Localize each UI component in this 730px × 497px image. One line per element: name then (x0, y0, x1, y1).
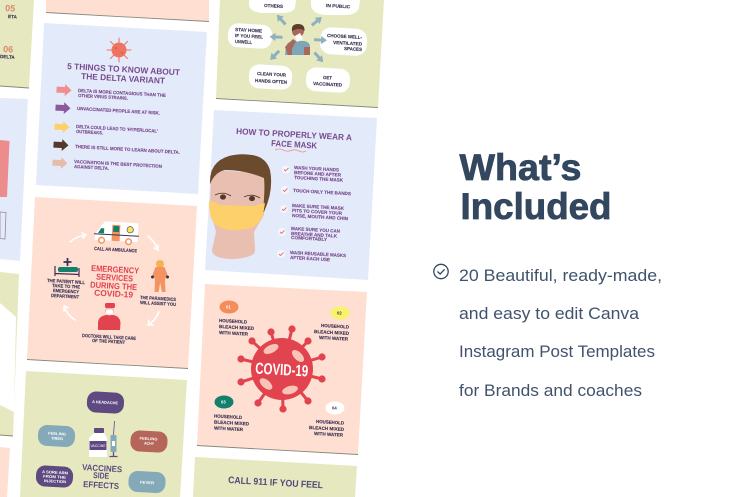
item 01: 01 (226, 304, 231, 310)
tip labels: HANDS OFTEN (255, 78, 288, 85)
text block: description (459, 266, 662, 400)
item 03: BLEACH MIXED (214, 420, 250, 426)
panel: top left green card (0, 0, 34, 88)
list: delta facts: OUTBREAKS. (76, 129, 103, 136)
heading: THE DELTA VARIANT (81, 71, 166, 86)
bubble: fever (128, 470, 166, 494)
bubble: sore arm: A SORE ARM (42, 469, 68, 475)
checklist: AFTER EACH USE (290, 255, 330, 262)
icon: coronavirus: COVID-19 (255, 361, 309, 380)
item 03: WITH WATER (214, 426, 244, 432)
tip labels: IN PUBLIC (326, 3, 351, 9)
item 02: BLEACH MIXED (314, 329, 350, 336)
caption: doctors (82, 333, 136, 345)
heading: EFFECTS (83, 479, 120, 491)
tip labels: VACCINATED (313, 81, 343, 88)
bubble: tired (37, 424, 76, 447)
heading: SERVICES (96, 272, 134, 284)
bubble: headache: A HEADACHE (92, 399, 119, 405)
arrows: cycle (64, 233, 159, 325)
checklist: FITS TO COVER YOUR (292, 208, 343, 216)
icon: syringe (110, 421, 118, 456)
tip labels (235, 3, 363, 88)
panel: top pink card (46, 0, 209, 22)
tip labels: IF YOU FEEL (235, 33, 263, 40)
item 04: 04 (332, 406, 337, 410)
list: delta facts: THERE IS STILL MORE TO LEARN ABOUT DELTA. (75, 144, 180, 155)
heading: EMERGENCY (91, 263, 140, 276)
caption: patient: DEPARTMENT (51, 293, 79, 300)
tip labels: SPACES (344, 46, 362, 52)
heading: DURING THE (90, 280, 138, 292)
panel: top left green card: 06 (3, 44, 13, 55)
panel: top left green card: 05 (5, 3, 15, 14)
checklist: WASH YOUR HANDS (294, 165, 339, 173)
caption: call ambulance: CALL AN AMBULANCE (94, 246, 137, 253)
list: delta facts (52, 84, 180, 171)
tip labels: VENTILATED (333, 40, 363, 47)
checklist: MAKE SURE THE MASK (292, 203, 345, 211)
list: delta facts: AGAINST DELTA. (74, 164, 109, 171)
icon: paramedic (151, 260, 169, 292)
heading: 5 THINGS TO KNOW ABOUT (67, 61, 181, 77)
item 03: 03 (221, 400, 226, 404)
title (460, 147, 612, 227)
panel: left green card (0, 272, 19, 436)
heading (90, 263, 140, 300)
arrows (267, 12, 327, 65)
item 01: HOUSEHOLD (219, 318, 248, 325)
tip labels: OTHERS (264, 3, 283, 9)
heading: FACE MASK (271, 138, 318, 151)
heading: HOW TO PROPERLY WEAR A (236, 126, 352, 142)
bubble: sore arm: FROM THE (43, 474, 67, 480)
item 03: HOUSEHOLD (214, 414, 243, 420)
illustration: face with mask (209, 154, 271, 259)
checklist: BREATHE AND TALK (291, 231, 338, 239)
panel: bottom left pink card (0, 447, 10, 497)
icon: hospital bed (55, 258, 79, 277)
bubble: fever: FEVER (140, 480, 154, 485)
panel: top left green card: DELTA (0, 54, 16, 60)
panel: call 911 (193, 457, 357, 497)
caption: doctors: DOCTORS WILL TAKE CARE (82, 333, 136, 341)
panel: vaccine side effects (20, 371, 187, 497)
icon: ambulance (93, 221, 140, 245)
item 02: HOUSEHOLD (321, 323, 350, 330)
tip labels: CLEAN YOUR (257, 71, 287, 78)
tip labels: GET (323, 75, 332, 81)
item 04: WITH WATER (314, 431, 344, 438)
icon: virus (107, 38, 131, 62)
bubbles (227, 0, 368, 93)
heading (82, 462, 123, 491)
item 01 (219, 300, 255, 337)
item 04: BLEACH MIXED (309, 425, 345, 432)
panel: emergency services (27, 197, 197, 368)
caption: paramedics: THE PARAMEDICS (140, 295, 176, 302)
checklist: NOSE, MOUTH AND CHIN (292, 213, 349, 221)
bubble: headache (86, 391, 125, 414)
item 04: HOUSEHOLD (316, 419, 345, 426)
bubble: achy (130, 430, 168, 453)
item 02: 02 (337, 310, 342, 316)
heading: SIDE (93, 470, 110, 481)
checklist: BEFORE AND AFTER (294, 170, 342, 178)
icon: sneezing person (285, 24, 310, 55)
card heading: CALL 911 IF YOU FEEL (228, 475, 323, 491)
caption: patient: THE PATIENT WILL (47, 278, 85, 285)
text block: description: 20 Beautiful, ready-made, (459, 266, 662, 285)
panel: how to wear a mask (205, 110, 377, 280)
caption: paramedics (140, 295, 177, 307)
panel: prevention tips (216, 0, 384, 108)
panel: top left green card: ETA (8, 14, 18, 20)
checklist (277, 165, 351, 262)
bubble: sore arm: INJECTION (44, 478, 66, 484)
checklist: MAKE SURE YOU CAN (291, 226, 341, 234)
text block: description: and easy to edit Canva (459, 304, 640, 323)
icon: check circle (434, 264, 448, 279)
bubble: achy: ACHY (144, 441, 155, 446)
heading: COVID-19 (94, 288, 134, 300)
tip labels: CHOOSE WELL- (327, 33, 363, 40)
item 01: WITH WATER (219, 330, 249, 337)
bubble: tired: FEELING (48, 431, 66, 437)
list: delta facts: UNVACCINATED PEOPLE ARE AT RISK. (77, 106, 160, 116)
caption: patient: TAKE TO THE (52, 283, 80, 290)
list: delta facts: DELTA COULD LEAD TO 'HYPERLOCAL' (76, 124, 158, 134)
title: Included (460, 186, 612, 227)
icon: coronavirus (237, 325, 326, 413)
list: delta facts: DELTA IS MORE CONTAGIOUS THAN THE (78, 88, 166, 98)
item 04 (309, 402, 345, 438)
text block: description: Instagram Post Templates (459, 342, 655, 361)
icon: doctor (98, 303, 120, 330)
title: What’s (460, 147, 582, 188)
item 02 (314, 306, 350, 342)
item 03 (214, 396, 250, 432)
checklist: WASH REUSABLE MASKS (290, 250, 346, 258)
checklist: COMFORTABLY (291, 235, 327, 242)
list: delta facts: VACCINATION IS THE BEST PROTECTION (74, 159, 163, 169)
caption: patient (47, 278, 85, 300)
checklist: TOUCHING THE MASK (294, 175, 344, 183)
caption: doctors: OF THE PATIENT (92, 338, 125, 345)
heading (236, 126, 352, 151)
item 01: BLEACH MIXED (219, 324, 255, 331)
item 02: WITH WATER (319, 335, 349, 342)
icon: vaccine bottle: VACCINE (90, 444, 106, 448)
bubble: tired: TIRED (51, 436, 63, 441)
icon: vaccine bottle (89, 428, 107, 457)
list: delta facts: OTHER VIRUS STRAINS. (78, 93, 128, 101)
caption: paramedics: WILL ASSIST YOU (140, 300, 177, 307)
squiggle (275, 149, 306, 152)
checklist: TOUCH ONLY THE BANDS (293, 188, 351, 196)
heading: VACCINES (82, 462, 123, 474)
panel: covid-19 (197, 284, 367, 454)
text block: description: for Brands and coaches (459, 381, 642, 400)
heading (67, 61, 181, 86)
tip labels: UNWELL (235, 39, 252, 45)
bubble: achy: FEELING (139, 436, 158, 442)
panel: 5 things about delta (36, 23, 207, 194)
bubble: sore arm (35, 465, 74, 488)
tip labels: STAY HOME (235, 27, 262, 34)
caption: patient: EMERGENCY (53, 288, 79, 294)
panel: left blue card (0, 98, 28, 261)
